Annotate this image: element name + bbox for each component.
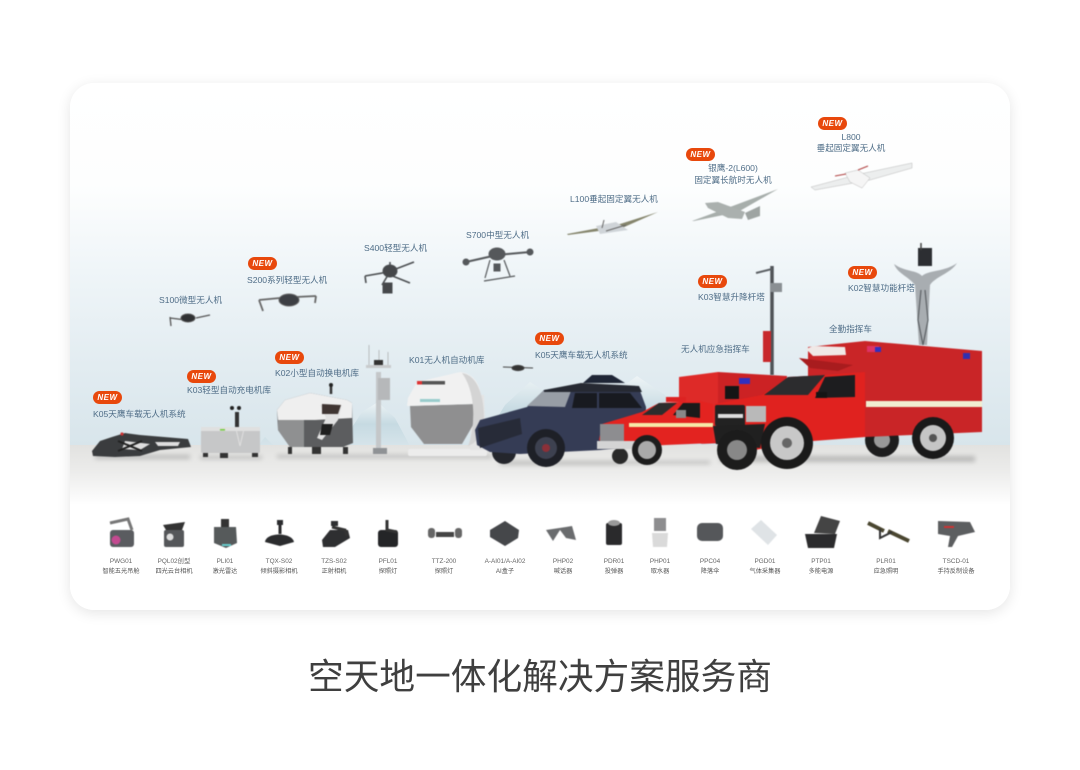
badge: NEW L800: NEW (822, 119, 844, 128)
label: 银鹰-2 (686, 148, 772, 185)
accessory: TTZ-200: 探照灯 (435, 567, 453, 575)
accessory: PFL01 (378, 520, 398, 575)
accessory: TZS-S02: 正射相机 (322, 567, 347, 575)
badge: NEW K05: NEW (97, 393, 119, 402)
ground shadows (95, 455, 975, 465)
icon: S700 drone (463, 248, 533, 281)
icon: L600 drone (692, 189, 778, 221)
accessory: PGD01: 气体采集器 (750, 567, 781, 575)
accessory: PTP01: PTP01 (811, 558, 831, 565)
icon: S200 drone (259, 294, 316, 311)
label: K05 vehicle drone system 2 (535, 332, 628, 360)
icon: L100 VTOL (567, 212, 658, 235)
label: K05 vehicle drone system: K05天鹰车载无人机系统 (93, 408, 186, 419)
product: weather pole (366, 345, 391, 454)
label: K02 small battery-swap dock (275, 351, 359, 378)
accessory: PTP01: 多能电源 (809, 567, 833, 575)
label: emergency command vehicle: 无人机应急指挥车 (681, 343, 750, 354)
label: S200 drone series (247, 257, 328, 285)
label: K05 vehicle drone system (93, 391, 186, 419)
accessory: TSCD-01: 手持反制设备 (937, 567, 975, 575)
accessory: PPC04: PPC04 (700, 558, 721, 565)
badge: NEW 银鹰: NEW (690, 150, 712, 159)
badge: NEW K03: NEW (191, 372, 213, 381)
label: L100 VTOL: L100垂起固定翼无人机 (570, 193, 658, 204)
badge: NEW K02: NEW (279, 353, 301, 362)
accessory: TQX-S02: 倾斜摄影相机 (260, 567, 298, 575)
label: full-duty command vehicle: 全勤指挥车 (829, 323, 872, 334)
label: K03 light charging dock: K03轻型自动充电机库 (187, 384, 271, 395)
accessory: PHP01: PHP01 (650, 558, 671, 565)
accessory: PQL02: 四光云台相机 (155, 567, 193, 575)
accessory: PLR01: PLR01 (876, 558, 896, 565)
accessory: PHP02: 喊话器 (554, 567, 573, 575)
label: S100 drone: S100微型无人机 (159, 294, 222, 305)
label: S400 drone: S400轻型无人机 (364, 242, 427, 253)
accessory: PLR01: 应急照明 (874, 567, 898, 575)
product: K03 tower (756, 266, 782, 375)
label: K05 vehicle drone system 2: K05天鹰车载无人机系统 (535, 349, 628, 360)
accessory: TQX-S02 (260, 520, 298, 575)
badge: NEW K02 tower: NEW (852, 268, 874, 277)
accessory: PLI01: PLI01 (217, 558, 234, 565)
label: K02 smart tower: K02智慧功能杆塔 (848, 282, 915, 293)
label: K02 smart tower (848, 266, 915, 293)
accessory: PFL01: PFL01 (379, 558, 398, 565)
badge: NEW K05 vehicle: NEW (539, 334, 561, 343)
product: K02 dock (277, 383, 353, 454)
product: K02 tower (894, 243, 957, 345)
accessory: PFL01: 探照灯 (379, 567, 397, 575)
accessory: PQL02 (155, 522, 193, 575)
product: command vehicle (713, 341, 982, 470)
accessory: TTZ-200 (428, 528, 462, 575)
accessory: A-AI01/A-AI02: AI盒子 (496, 567, 514, 575)
accessory: TZS-S02: TZS-S02 (321, 558, 347, 565)
accessory: PWG01: PWG01 (110, 558, 133, 565)
accessory: PDR01 (604, 520, 625, 575)
accessory: PLI01: 激光雷达 (213, 567, 237, 575)
accessory: A-AI01/A-AI02 (485, 521, 526, 575)
label: K02 small battery-swap dock: K02小型自动换电机库 (275, 367, 359, 378)
accessory: PHP02: PHP02 (553, 558, 574, 565)
product: emergency command vehicle (597, 372, 790, 465)
label: K01 auto dock: K01无人机自动机库 (409, 354, 485, 365)
badge: NEW K03 tower: NEW (702, 277, 724, 286)
label: 银鹰-2: 固定翼长航时无人机 (694, 174, 772, 185)
accessory: TQX-S02: TQX-S02 (266, 558, 293, 565)
icon: S100 drone (170, 314, 210, 326)
accessory: TSCD-01 (937, 521, 975, 575)
accessory: PLR01 (868, 523, 909, 575)
title: 空天地一体化解决方案服务商 (308, 657, 772, 697)
accessories row (102, 516, 975, 575)
label: K03 smart tower: K03智慧升降杆塔 (698, 291, 765, 302)
label: 银鹰-2: 银鹰-2(L600) (708, 162, 758, 173)
label: L800: 垂起固定翼无人机 (817, 142, 886, 153)
accessory: A-AI01/A-AI02: A-AI01/A-AI02 (485, 558, 526, 565)
icon: S400 drone (365, 262, 414, 293)
accessory: PWG01 (102, 519, 140, 575)
accessory: TSCD-01: TSCD-01 (943, 558, 970, 565)
accessory: PWG01: 智能五光吊舱 (102, 567, 140, 575)
accessory: PGD01 (750, 520, 781, 575)
label: S200 drone series: S200系列轻型无人机 (247, 274, 328, 285)
accessory: PDR01: PDR01 (604, 558, 625, 565)
accessory: PHP01: 取水器 (651, 567, 670, 575)
icon: L800 VTOL (811, 163, 912, 190)
accessory: TZS-S02 (321, 521, 350, 575)
product: K05 dock (92, 432, 191, 457)
accessory: PPC04: 降落伞 (701, 567, 720, 575)
badge: NEW S200: NEW (252, 259, 274, 268)
label: L800: L800 (841, 132, 861, 142)
accessory: PPC04 (697, 523, 723, 575)
accessory: PHP02 (546, 526, 576, 575)
label: K03 smart tower (698, 275, 765, 302)
icon: small drone (503, 365, 533, 371)
accessory: PHP01 (650, 518, 671, 575)
accessory: PTP01 (805, 516, 840, 575)
accessory: PQL02: PQL02创型 (158, 556, 191, 565)
product: K03 dock (201, 406, 260, 458)
label: S700 drone: S700中型无人机 (466, 229, 529, 240)
label: K03 light charging dock (187, 370, 271, 395)
product: K01 dock (407, 372, 487, 456)
product: SUV (475, 375, 646, 467)
label: L800 (817, 117, 886, 153)
accessory: PDR01: 投弹器 (605, 567, 624, 575)
accessory: PLI01 (213, 519, 237, 575)
accessory: TTZ-200: TTZ-200 (432, 558, 457, 565)
accessory: PGD01: PGD01 (755, 558, 776, 565)
panel: product card (70, 83, 1010, 613)
